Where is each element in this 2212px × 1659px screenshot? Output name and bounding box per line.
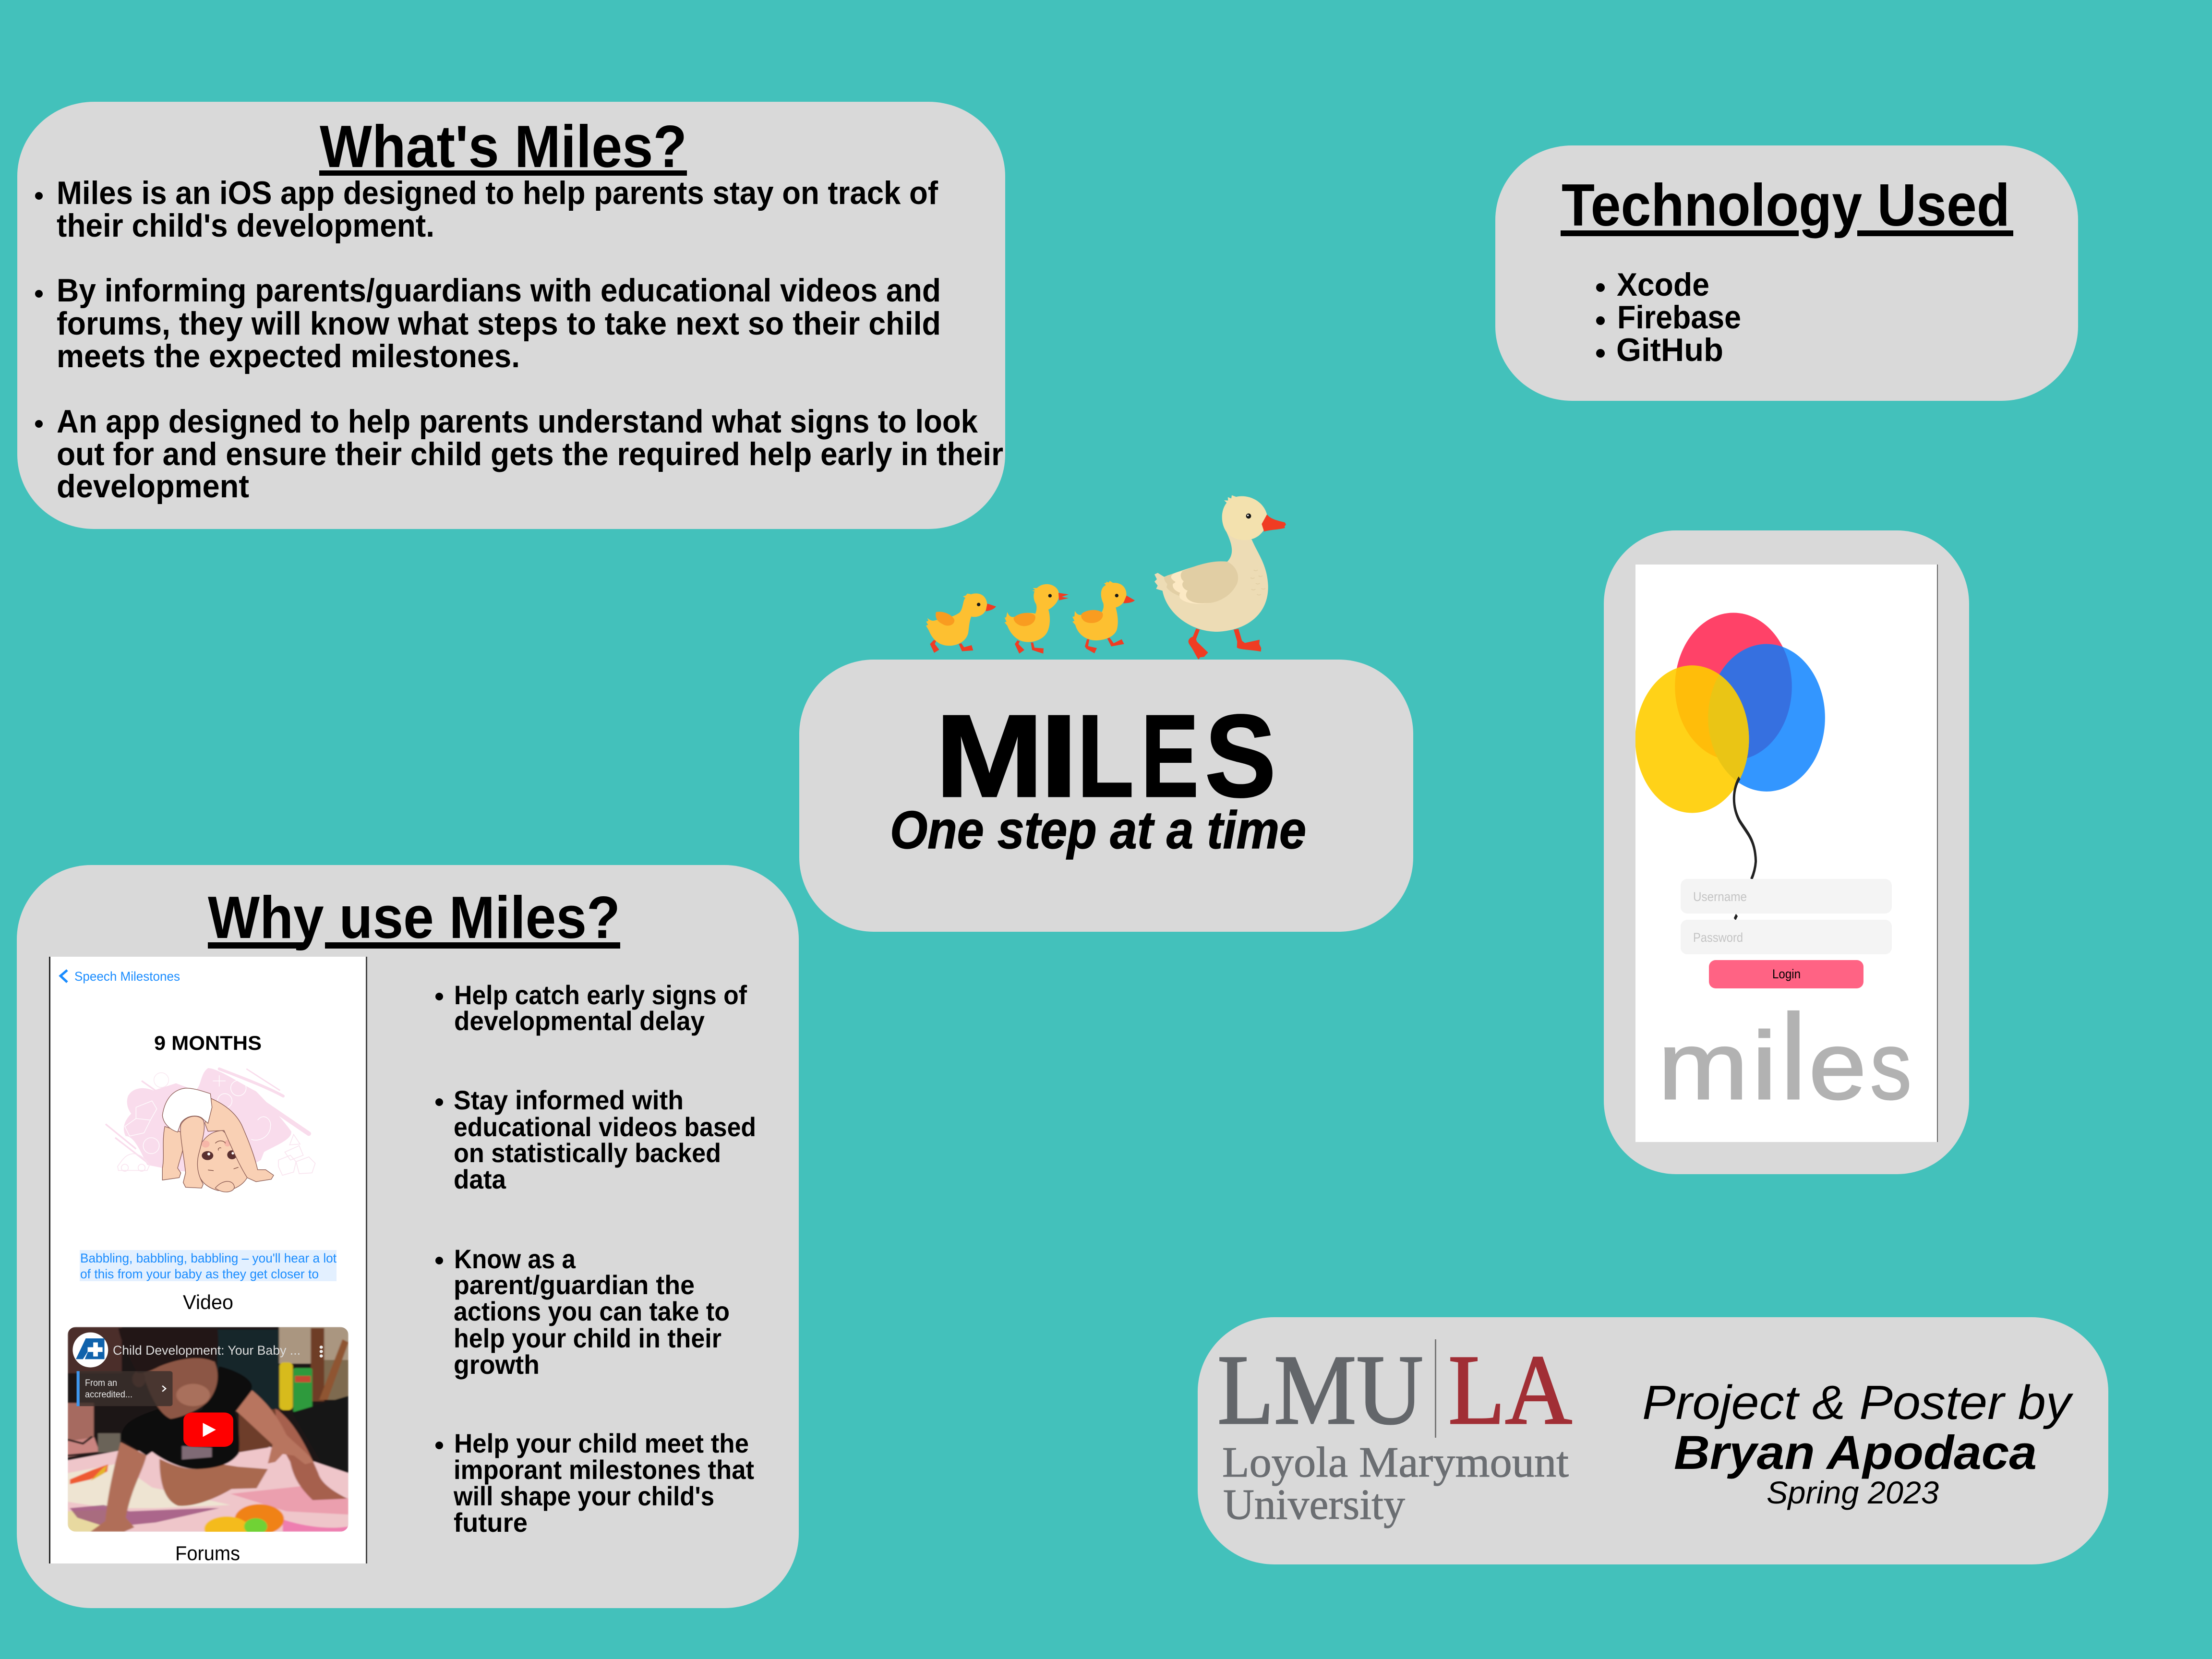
panel: credits [1198,1317,2108,1564]
title: MILES: I [1040,690,1078,821]
text block: technology list: Firebase [1617,299,1741,336]
text block: benefits bullets: data [454,1164,506,1194]
badge text: From an [85,1378,117,1388]
text block: description bullets: out for and ensure their child gets the required help early in their [57,436,1003,472]
icon: duckling 3 [1072,581,1135,653]
screen [1635,565,1938,1142]
logo: miles: i [1752,1012,1777,1119]
button: Login [1709,960,1863,988]
heading: 9 MONTHS: 9 MONTHS [154,1032,262,1054]
text block: benefits bullets: imporant milestones that [454,1455,754,1485]
text block: benefits bullets: parent/guardian the [454,1270,695,1300]
logo: miles: e [1809,1012,1866,1119]
text block: benefits bullets: help your child in their [454,1323,721,1353]
text block: description bullets: development [57,468,249,505]
text block: benefits bullets: Stay informed with [454,1085,684,1115]
text block: benefits bullets: actions you can take to [454,1296,730,1326]
text block: description bullets: Miles is an iOS app designed to help parents stay on track of [57,175,938,211]
text block: technology list: Xcode [1617,266,1709,303]
text block: benefits bullets: future [454,1507,528,1538]
badge text: accredited... [85,1390,132,1400]
logo: miles: s [1870,1012,1911,1119]
text block: technology list: GitHub [1616,332,1723,368]
panel: Why use Miles? [17,865,799,1608]
text block: description bullets: forums, they will know what steps to take next so their child [57,305,941,342]
text block: description bullets: their child's development. [57,207,434,244]
icon: balloons [1635,613,1825,919]
text: date: Spring 2023 [1767,1475,1939,1510]
icon: mother duck [1154,495,1286,660]
logo: LMU LA [1217,1334,1572,1528]
video thumbnail [68,1327,349,1541]
text block: description bullets [35,175,1003,505]
logo: miles: m [1658,1012,1748,1119]
back link: Speech Milestones: Speech Milestones [74,969,180,984]
screenshot: 9 months milestone screen [49,957,367,1564]
heading: What's Miles?: What's Miles? [320,114,687,180]
text block: benefits bullets: will shape your child's [453,1481,714,1511]
text block: description bullets: meets the expected milestones. [57,338,520,374]
heading: Technology Used: Technology Used [1562,172,2010,239]
icon: YouTube play button [183,1413,233,1447]
text block: benefits bullets [435,980,756,1538]
icon: baby illustration [106,1068,315,1192]
logo: LMU LA: University [1223,1481,1405,1528]
title: MILES: L [1077,690,1134,821]
text block: technology list [1596,266,1741,368]
text: highlighted caption: Babbling, babbling, babbling – you'll hear a lot [80,1251,337,1265]
title: MILES: M [935,690,1044,821]
input: Username: Username [1693,890,1747,904]
panel: What's Miles? [17,102,1005,529]
icon: ducklings [926,581,1135,654]
text: author: Bryan Apodaca [1674,1426,2037,1479]
text block: description bullets: By informing parents/guardians with educational videos and [57,272,941,309]
heading: Why use Miles?: Why use Miles? [208,885,620,951]
badge: from an accredited [77,1371,173,1406]
video title: Child Development: Your Baby ... [113,1343,301,1358]
logo: LMU LA: Loyola Marymount [1222,1439,1569,1486]
title: MILES: E [1141,690,1199,821]
panel: login screenshot [1604,530,1969,1174]
logo: LMU LA: LMU [1217,1334,1423,1445]
text block: benefits bullets: Help catch early signs of [454,980,747,1010]
title: MILES: S [1205,690,1276,821]
text: highlighted caption: of this from your baby as they get closer to [80,1267,319,1281]
icon: channel logo [72,1333,108,1368]
subtitle: One step at a time: One step at a time [890,801,1306,860]
icon: menu dots [320,1346,323,1358]
text block: benefits bullets: Help your child meet the [454,1428,749,1458]
text: project credit: Project & Poster by [1642,1376,2074,1430]
icon: duckling 1 [926,593,996,653]
text block: benefits bullets: developmental delay [454,1006,705,1036]
text block: benefits bullets: educational videos based [454,1112,756,1142]
icon: duckling 2 [1005,584,1069,654]
input: Username [1681,879,1892,914]
badge text [85,1378,132,1400]
text block: benefits bullets: Know as a [454,1244,576,1274]
input: Password: Password [1693,930,1743,945]
panel: title [799,660,1413,932]
button: Login: Login [1772,967,1801,981]
input: Password [1681,920,1892,954]
logo: miles: l [1780,990,1807,1125]
text block: benefits bullets: growth [454,1349,540,1380]
panel: Technology Used [1495,145,2078,401]
text block: description bullets: An app designed to help parents understand what signs to look [57,403,978,440]
text: highlighted caption [80,1250,337,1281]
text block: benefits bullets: on statistically backed [454,1138,721,1168]
label: Forums: Forums [175,1542,240,1564]
label: Video: Video [183,1291,233,1313]
logo: LMU LA: LA [1448,1334,1572,1445]
